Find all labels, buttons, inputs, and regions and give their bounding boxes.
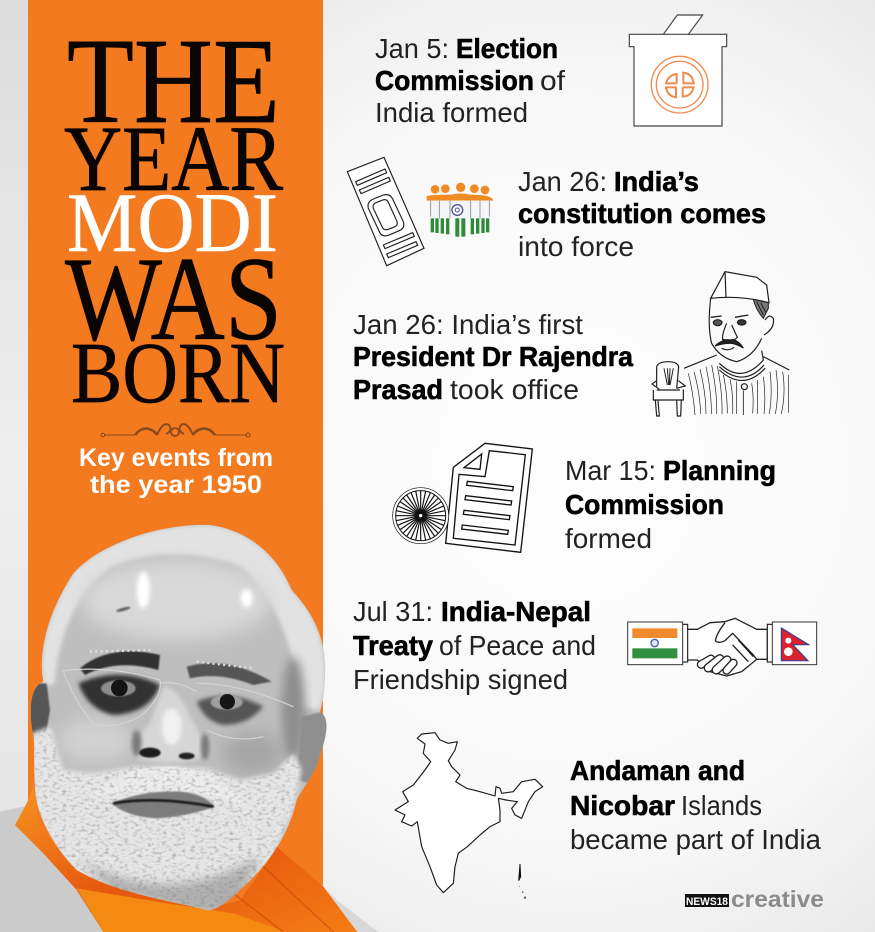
eye sockets bbox=[78, 675, 160, 715]
ears bbox=[28, 683, 50, 740]
ornament divider bbox=[101, 424, 250, 437]
title: MODI bbox=[67, 176, 278, 270]
title: BORN bbox=[71, 324, 285, 421]
hair band bbox=[42, 525, 325, 710]
title bbox=[64, 14, 285, 421]
logo: News18 Creative: creative bbox=[731, 886, 824, 912]
icon: handshake with India and Nepal flags bbox=[628, 618, 817, 676]
icon: document bbox=[446, 443, 532, 552]
event 1 text: Election Commission: Commission bbox=[375, 65, 534, 96]
title: THE bbox=[67, 14, 280, 149]
brows bbox=[80, 651, 160, 675]
event 3 text: first President: took office bbox=[450, 374, 579, 405]
event 1 text: Election Commission: India formed bbox=[375, 97, 528, 128]
event 6 text: Andaman and Nicobar: Andaman and bbox=[570, 755, 745, 786]
icon: people with Ashoka chakra bbox=[427, 183, 493, 237]
event 4 text: Planning Commission: Mar 15: bbox=[565, 455, 656, 486]
event 4 text: Planning Commission: formed bbox=[565, 523, 652, 554]
nose bbox=[136, 687, 203, 762]
event 5 text: India-Nepal Treaty: Friendship signed bbox=[353, 664, 568, 695]
event 5 text: India-Nepal Treaty: Treaty bbox=[353, 630, 433, 661]
event 2 text: constitution: Jan 26: bbox=[518, 166, 607, 197]
logo: News18 Creative: NEWS18 bbox=[686, 896, 728, 908]
event 1 text: Election Commission: Jan 5: bbox=[375, 33, 449, 64]
title: YEAR bbox=[64, 108, 283, 211]
forehead light bbox=[80, 560, 273, 640]
event 6 text: Andaman and Nicobar: Nicobar bbox=[570, 790, 675, 821]
event 3 text: first President bbox=[353, 309, 633, 405]
right side shade bbox=[282, 657, 305, 763]
event 6 text: Andaman and Nicobar bbox=[570, 755, 821, 855]
panel: orange title column bbox=[28, 0, 323, 932]
event 4 text: Planning Commission: Planning bbox=[663, 455, 776, 486]
mustache bbox=[90, 767, 253, 810]
event 2 text: constitution bbox=[518, 166, 766, 262]
neck shadow bbox=[80, 857, 260, 915]
icon: map of India bbox=[395, 733, 543, 899]
scarf bbox=[15, 787, 357, 932]
head bbox=[20, 517, 337, 917]
subtitle: the year 1950 bbox=[90, 471, 262, 499]
event 3 text: first President: Prasad bbox=[353, 374, 443, 405]
event 2 text: constitution: constitution comes bbox=[518, 198, 766, 229]
kurta right bbox=[320, 883, 378, 932]
lips bbox=[112, 791, 215, 818]
title: WAS bbox=[65, 232, 282, 365]
event 4 text: Planning Commission: Commission bbox=[565, 489, 724, 520]
left margin strip bbox=[0, 0, 28, 932]
subtitle bbox=[79, 444, 273, 499]
event 4 text: Planning Commission bbox=[565, 455, 776, 554]
event 5 text: India-Nepal Treaty: Jul 31: bbox=[353, 596, 433, 627]
beard bbox=[32, 727, 302, 915]
event 3 text: first President: President Dr Rajendra bbox=[353, 341, 633, 372]
event 3 text: first President: Jan 26: India’s first bbox=[353, 309, 583, 340]
kurta left bbox=[0, 807, 107, 932]
icon: constitution scroll bbox=[347, 157, 424, 266]
glasses bbox=[63, 669, 293, 739]
icon: ballot box bbox=[629, 15, 727, 126]
event 2 text: constitution: India’s bbox=[614, 166, 699, 197]
event 6 text: Andaman and Nicobar: Islands bbox=[681, 790, 762, 821]
event 6 text: Andaman and Nicobar: became part of India bbox=[570, 824, 821, 855]
event 1 text: Election Commission: of bbox=[540, 65, 565, 96]
event 5 text: India-Nepal Treaty bbox=[353, 596, 596, 695]
event 1 text: Election Commission bbox=[375, 33, 565, 128]
icon: Dr Rajendra Prasad sketch with chair bbox=[652, 272, 789, 416]
event 2 text: constitution: into force bbox=[518, 231, 634, 262]
event 1 text: Election Commission: Election bbox=[456, 33, 558, 64]
portrait: Modi in greyscale with orange scarf bbox=[0, 517, 378, 932]
subtitle: Key events from bbox=[79, 444, 273, 472]
event 5 text: India-Nepal Treaty: India-Nepal bbox=[441, 596, 591, 627]
logo: News18 Creative bbox=[685, 886, 824, 912]
event 5 text: India-Nepal Treaty: of Peace and bbox=[439, 630, 596, 661]
eyes bbox=[101, 680, 136, 696]
cheek light bbox=[58, 718, 132, 762]
icon: Ashoka chakra bbox=[393, 488, 449, 544]
